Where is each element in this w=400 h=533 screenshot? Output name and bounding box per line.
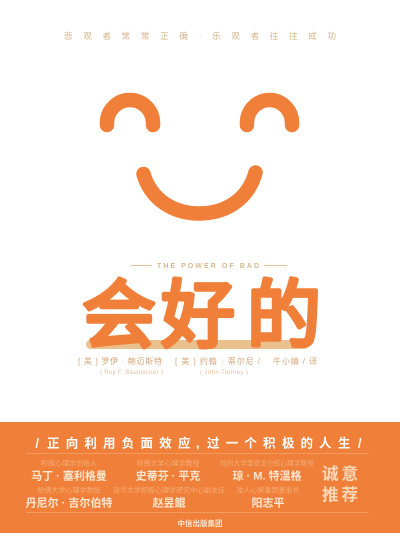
title underline bar (86, 340, 309, 349)
endorser names (26, 468, 302, 510)
endorser titles: 清华大学积极心理学研究中心副主任 (113, 486, 225, 494)
endorser titles: 加州大学圣迭戈分校心理学教授 (220, 458, 314, 468)
main title (82, 256, 321, 363)
icon: left eye (107, 100, 153, 125)
publisher: 中信出版集团 (178, 518, 222, 528)
icon: right eye (247, 100, 292, 125)
endorser names: 阳志平 (252, 496, 284, 510)
endorser names: 赵昱鲲 (152, 496, 186, 510)
endorser titles (38, 458, 314, 494)
title character 3: 的 (247, 256, 321, 363)
english subtitle: THE POWER OF BAD (157, 263, 259, 270)
icon: smiley face (107, 100, 292, 214)
endorser titles: 哈佛大学心理学教授 (136, 458, 200, 468)
title character 1: 会 (82, 256, 156, 363)
author 2 english name: ( John Tierney ) (200, 370, 248, 376)
endorser titles: 积极心理学创始人 (41, 458, 97, 468)
endorser titles: 攻人心智集团董事长 (236, 486, 300, 494)
endorser names: 琼 · M. 特温格 (232, 468, 302, 482)
slogan: /正向利用负面效应,过一个积极的人生/ (36, 436, 362, 450)
endorser names: 史蒂芬 · 平克 (136, 468, 200, 482)
title character 2: 好 (161, 256, 235, 363)
panel: endorsements (0, 422, 400, 533)
translator: 牛小婧 / 译 (273, 356, 317, 366)
endorser titles: 哈佛大学心理学教授 (38, 486, 100, 494)
endorser names: 丹尼尔 · 吉尔伯特 (26, 496, 112, 510)
author 1: [ 美 ] 罗伊 · 鲍迈斯特 (78, 356, 162, 366)
sincere recommendation: 诚意 (322, 464, 358, 484)
icon: mouth (144, 172, 256, 214)
sincere recommendation (322, 464, 358, 504)
authors (78, 356, 317, 376)
sincere recommendation: 推荐 (322, 486, 358, 504)
author 1 english name: ( Roy F. Baumeister ) (100, 370, 163, 376)
endorser names: 马丁 · 塞利格曼 (31, 468, 107, 482)
tagline: 悲观者常常正确·乐观者往往成功 (64, 31, 336, 41)
author 2: [ 美 ] 约翰 · 蒂尔尼 / (175, 356, 261, 366)
